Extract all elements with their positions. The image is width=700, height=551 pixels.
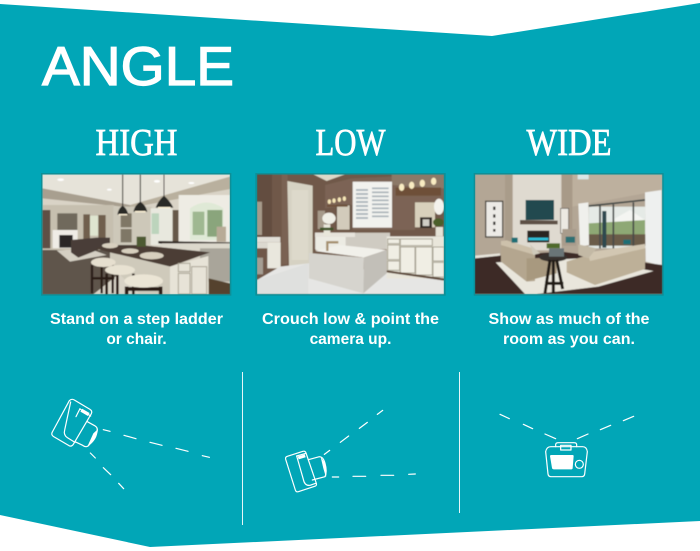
icon: camera angled down <box>52 399 209 489</box>
icon: camera wide view <box>500 414 634 477</box>
heading: low: LOW <box>316 122 386 164</box>
caption: wide: room as you can. <box>503 331 635 348</box>
heading: wide: WIDE <box>526 122 612 164</box>
panel: low <box>255 122 446 492</box>
caption: low: Crouch low & point the <box>262 311 439 328</box>
icon: camera angled up <box>286 410 415 492</box>
caption: low: camera up. <box>310 331 391 348</box>
caption: high: Stand on a step ladder <box>50 311 223 328</box>
photo: bathroom <box>255 173 446 296</box>
caption: wide: Show as much of the <box>488 311 650 328</box>
photo: living room <box>474 173 664 296</box>
title: ANGLE <box>42 35 234 97</box>
panel: wide <box>474 122 664 477</box>
heading: high: HIGH <box>96 122 178 164</box>
panel: high <box>41 122 231 489</box>
caption: high: or chair. <box>106 331 167 348</box>
photo: kitchen <box>41 173 231 296</box>
